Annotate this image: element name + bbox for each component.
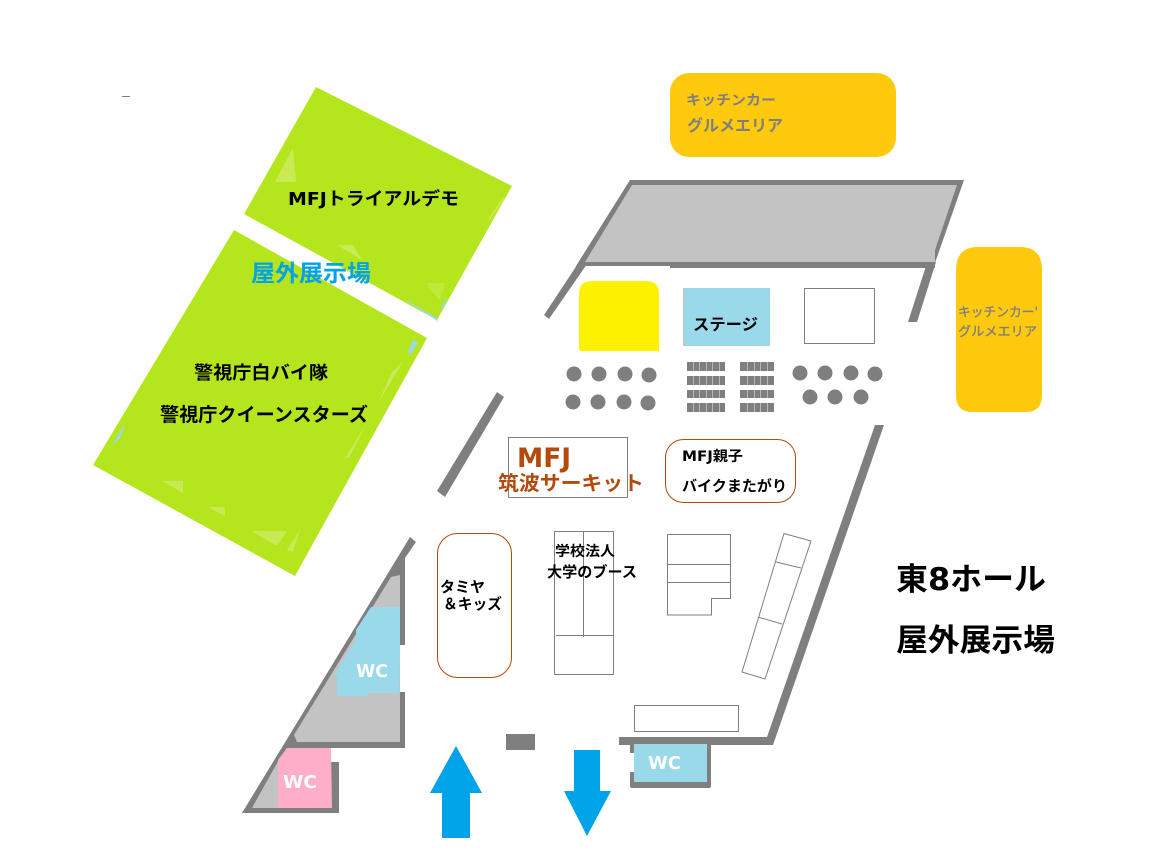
panel: bottom right WC bbox=[628, 744, 711, 788]
small dash mark bbox=[122, 96, 130, 97]
booth: MFJ parent and child: MFJ親子 bbox=[682, 449, 743, 465]
label: MFJ trial demo: MFJトライアルデモ bbox=[288, 188, 459, 210]
panel: kitchen car right bbox=[956, 247, 1042, 412]
seating: left round tables bbox=[566, 366, 656, 410]
booth: MFJ parent and child bbox=[666, 440, 796, 502]
panel: top gray building section bbox=[544, 180, 964, 322]
arrow: exit down bbox=[564, 750, 611, 836]
panel: kitchen car top bbox=[670, 73, 896, 157]
wall: right hall wall and bottom wall bbox=[619, 425, 884, 745]
panel: bottom right WC: WC bbox=[648, 753, 681, 774]
label: gourmet area: グルメエリア bbox=[958, 325, 1037, 340]
title: East hall 8: 東8ホール bbox=[896, 562, 1046, 598]
booth: school and university: 大学のブース bbox=[547, 563, 637, 581]
heading: outdoor exhibition area in blue: 屋外展示場 bbox=[251, 261, 371, 287]
booth: MFJ Tsukuba circuit bbox=[498, 438, 644, 498]
label: kitchen car: キッチンカー bbox=[686, 93, 776, 109]
pink WC area: WC bbox=[283, 772, 317, 793]
booth: MFJ parent and child: バイクまたがり bbox=[682, 477, 787, 495]
seating: right round tables bbox=[792, 366, 882, 404]
stage: ステージ bbox=[693, 315, 758, 334]
panel: police outdoor area bbox=[93, 230, 427, 576]
white booth beside stage bbox=[804, 288, 874, 344]
title: outdoor exhibition area: 屋外展示場 bbox=[896, 623, 1055, 659]
blue WC area bbox=[334, 607, 400, 696]
wall: mid left hall wall bbox=[437, 392, 504, 497]
blue WC area: WC bbox=[356, 661, 388, 682]
booth: MFJ Tsukuba circuit: 筑波サーキット bbox=[498, 471, 644, 495]
booth: school and university bbox=[547, 531, 637, 674]
label: gourmet area: グルメエリア bbox=[687, 116, 783, 135]
label: Queen Stars: 警視庁クイーンスターズ bbox=[160, 403, 368, 426]
booth: slanted outline along right wall bbox=[742, 534, 811, 679]
booth: Tamiya and kids bbox=[438, 534, 512, 678]
booth: bottom rectangle bbox=[634, 706, 738, 732]
panel: MFJ trial demo outdoor area bbox=[244, 87, 512, 320]
booth: school and university: 学校法人 bbox=[555, 543, 615, 560]
booth: MFJ Tsukuba circuit: MFJ bbox=[517, 443, 571, 474]
label: kitchen car: キッチンカー' bbox=[958, 306, 1038, 320]
arrow: entrance up bbox=[430, 746, 482, 838]
booth: stepped outline bbox=[668, 534, 730, 615]
yellow booth bbox=[579, 281, 659, 351]
gray entrance block bbox=[506, 734, 535, 750]
panel: left toilet block bbox=[242, 537, 416, 813]
stage bbox=[683, 288, 770, 346]
booth: Tamiya and kids: タミヤ bbox=[440, 578, 485, 596]
booth: Tamiya and kids: ＆キッズ bbox=[443, 595, 502, 613]
pink WC area bbox=[278, 748, 332, 808]
seating: stage chairs grid bbox=[687, 362, 774, 412]
label: white motorcycle police: 警視庁白バイ隊 bbox=[194, 363, 328, 384]
